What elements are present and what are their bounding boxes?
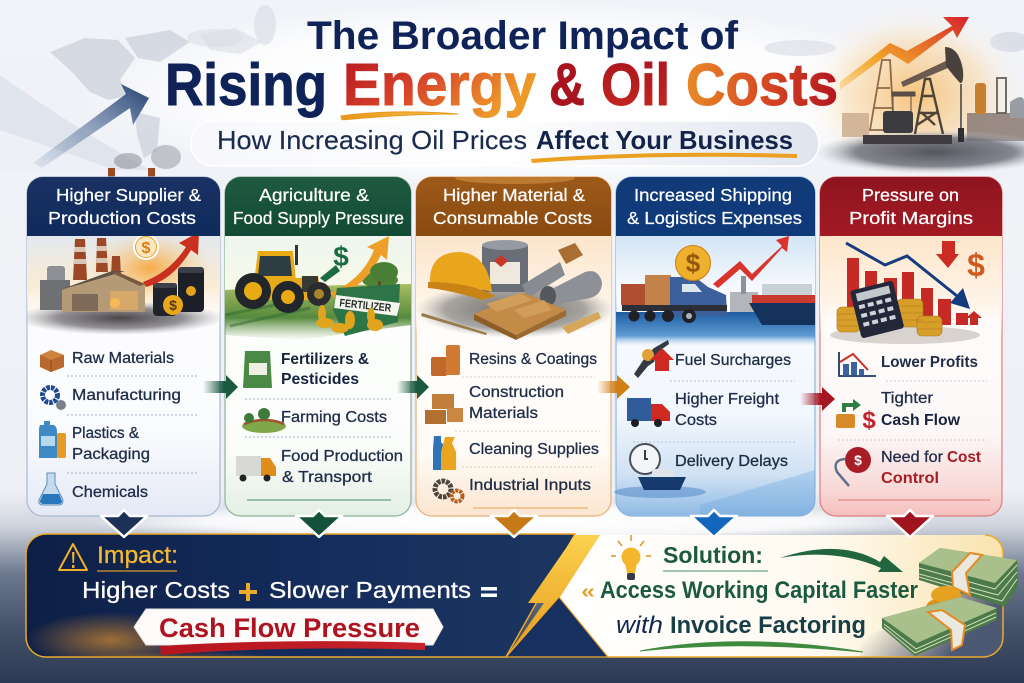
list item: construction materials [425, 384, 564, 424]
icon: pipes [522, 243, 602, 306]
heading: Agriculture & [259, 185, 369, 205]
impact equation: Higher Costs [82, 577, 230, 603]
solution panel [506, 535, 1018, 657]
icon: truck [621, 275, 727, 323]
list item: need for cost control: $ [854, 452, 862, 468]
list item: food production and transport: Food Production [281, 448, 403, 465]
list item: manufacturing [42, 387, 181, 410]
chevron: red [887, 510, 933, 537]
list item: industrial inputs [435, 477, 591, 502]
subtitle pill: Affect Your Business [536, 125, 793, 155]
callout: cash flow pressure [134, 609, 443, 655]
panel: higher material and consumable costs [415, 172, 615, 516]
chevron: orange [491, 510, 537, 537]
icon: red rising arrow [143, 232, 199, 287]
list item: chemicals: Chemicals [72, 484, 148, 501]
icon: blue rising arrow [33, 84, 149, 168]
illustration: factory, barrels and rising cost arrow [27, 236, 220, 334]
heading [627, 185, 802, 228]
heading: Increased Shipping [634, 185, 792, 205]
arrow: panel 1 to panel 2 [203, 375, 238, 399]
list item: food production and transport [236, 448, 403, 486]
icon: rising orange red arrow [840, 17, 969, 90]
subtitle pill [191, 121, 819, 166]
heading [233, 185, 404, 228]
arrow: curved green arrow [780, 549, 903, 572]
icon: green dollar: $ [333, 241, 349, 272]
list item: plastics and packaging [39, 421, 150, 463]
heading: Profit Margins [849, 208, 973, 228]
chevron: blue [691, 510, 737, 537]
icon: dollar coin [676, 246, 710, 280]
icon: red rising arrow [713, 236, 789, 288]
list item: manufacturing: Manufacturing [72, 387, 181, 404]
list item: cleaning supplies [433, 436, 599, 470]
list item: construction materials: Materials [469, 405, 538, 422]
list item: industrial inputs: Industrial Inputs [469, 477, 591, 494]
title line 1: The Broader Impact of [307, 14, 739, 58]
list item: higher freight costs: Costs [675, 412, 717, 429]
list item: cleaning supplies: Cleaning Supplies [469, 441, 599, 458]
icon: fertilizer bag: FERTILIZER [339, 297, 392, 315]
arrow: panel 2 to panel 3 [397, 375, 429, 399]
arrow: panel 4 to panel 5 [800, 387, 835, 411]
illustration: truck, ship and rising cost arrow [616, 236, 815, 346]
header illustration: world map [50, 28, 262, 158]
heading [849, 185, 973, 228]
list item: plastics and packaging: Plastics & [72, 425, 139, 442]
heading: Food Supply Pressure [233, 208, 404, 228]
list item: fertilizers and pesticides: Fertilizers & [281, 351, 369, 368]
list item: fuel surcharges: Fuel Surcharges [675, 352, 791, 369]
list item: need for cost control: Control [881, 470, 939, 487]
title line 2: Costs [686, 52, 838, 118]
list item: construction materials: Construction [469, 384, 564, 401]
list item: higher freight costs [627, 391, 780, 429]
icon: paint can [482, 240, 528, 292]
solution headline: Access Working Capital Faster [600, 577, 918, 604]
lightning bolt [506, 535, 600, 657]
connector chevrons [101, 510, 933, 537]
header decoration: smoke clouds and swoosh [0, 5, 1024, 177]
list item: chemicals [39, 473, 148, 505]
icon: fertilizer bag [316, 284, 400, 336]
icon: down arrow [936, 241, 959, 268]
illustration: oil pumpjack and refinery [800, 5, 1024, 185]
list item: farming costs [242, 408, 387, 433]
list item: tighter cash flow: Cash Flow [881, 412, 961, 429]
impact equation [82, 577, 497, 603]
bar chart [847, 258, 968, 325]
list item: food production and transport: & Transport [282, 469, 373, 486]
list item: tighter cash flow: $ [862, 407, 876, 434]
panel: increased shipping and logistics expenses [614, 177, 815, 516]
icon: hard hat [428, 252, 496, 300]
icon: tractor [235, 245, 331, 313]
illustration: helmet, paint can, pipes and pallet [415, 236, 615, 340]
heading: Pressure on [862, 185, 959, 205]
icon: orange dollar: $ [967, 247, 985, 283]
illustration: falling bar chart, calculator and coins [820, 236, 1002, 344]
list item: resins and coatings [431, 345, 597, 376]
icon: dollar coin [133, 234, 159, 260]
title line 2: & [549, 52, 585, 118]
solution label: Solution: [663, 542, 763, 568]
panel: agriculture and food supply pressure [225, 177, 411, 516]
title line 2: Oil [601, 52, 670, 118]
list item: delivery delays: Delivery Delays [675, 453, 788, 470]
callout: cash flow pressure: Cash Flow Pressure [159, 613, 420, 643]
icon: barrels [153, 267, 204, 316]
title line 2 [165, 52, 838, 118]
heading: Higher Material & [443, 185, 585, 205]
icon: dollar coin: $ [686, 248, 701, 278]
chevron: green [296, 510, 342, 537]
solution headline: Invoice Factoring [670, 612, 866, 639]
heading: Higher Supplier & [56, 185, 201, 205]
list item: resins and coatings: Resins & Coatings [469, 351, 597, 368]
subtitle pill: How Increasing Oil Prices [217, 125, 527, 155]
list item: lower profits: Lower Profits [881, 354, 978, 371]
solution headline [600, 577, 918, 652]
list item: plastics and packaging: Packaging [72, 446, 150, 463]
icon: calculator [850, 280, 904, 339]
chevron: navy [101, 510, 147, 537]
icon: cargo ship [730, 276, 815, 325]
icon: light bulb [611, 535, 651, 580]
list item: raw materials: Raw Materials [72, 350, 174, 367]
icon: warning triangle [59, 544, 87, 570]
list item: farming costs: Farming Costs [281, 409, 387, 426]
list item: need for cost control: Cost [947, 449, 982, 466]
icon: barrels: $ [169, 297, 177, 313]
impact label: Impact: [97, 542, 178, 569]
icons: coins [837, 299, 942, 336]
list item: fuel surcharges [634, 340, 791, 378]
list item: need for cost control: Need for [881, 449, 944, 466]
title line 2: Rising [165, 52, 327, 118]
icon: pallet and lumber [421, 293, 601, 340]
heading: Consumable Costs [433, 208, 592, 228]
list item: delivery delays [614, 444, 788, 498]
heading: Production Costs [48, 208, 196, 228]
list item: tighter cash flow [836, 390, 961, 434]
illustration: tractor, field and fertilizer [225, 236, 411, 340]
list item: tighter cash flow: Tighter [881, 390, 934, 407]
impact panel [25, 533, 576, 658]
panel: higher supplier and production costs [15, 177, 225, 516]
arrow: panel 3 to panel 4 [597, 375, 630, 399]
title [165, 14, 838, 120]
heading [433, 185, 592, 228]
icon: stacks of cash and coins [882, 548, 1018, 656]
impact equation: Slower Payments [269, 577, 471, 603]
panel: pressure on profit margins [820, 177, 1002, 516]
heading: & Logistics Expenses [627, 208, 802, 228]
list item: raw materials [40, 350, 174, 372]
chevrons: « [581, 581, 595, 603]
list item: fertilizers and pesticides: Pesticides [281, 371, 359, 388]
list item: higher freight costs: Higher Freight [675, 391, 780, 408]
icon: orange arrow [330, 236, 389, 298]
list item: need for cost control [836, 447, 982, 487]
title line 2: Energy [343, 52, 536, 118]
heading [48, 185, 201, 228]
list item: lower profits [839, 352, 978, 376]
list item: fertilizers and pesticides [243, 351, 369, 388]
icon: dollar coin: $ [142, 240, 151, 257]
solution headline: with [616, 612, 663, 639]
